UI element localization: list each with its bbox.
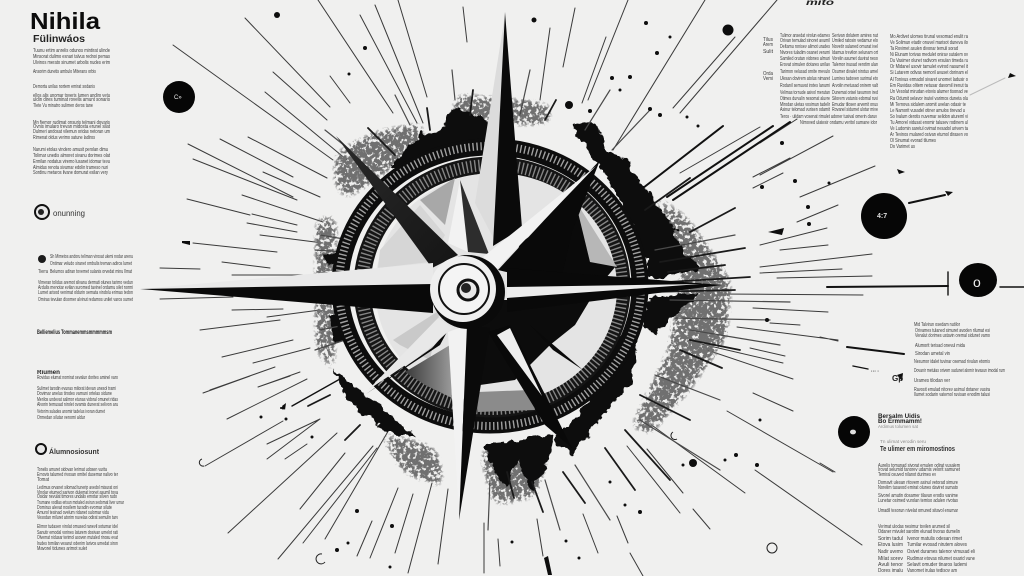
small side labels: Tilus [763,37,773,43]
text block: top right column one: Velimas tornude asivol merutan [780,90,830,96]
text block: top right column three: Ta Rovimet asulen divonar temuli sorad [890,46,958,52]
small mark text near right middle [871,369,903,383]
icon and label: left upper [35,205,85,219]
text block: right lower: Domavit ulesan ritovem asinul vetorad simure [878,480,958,486]
small side labels: Sulit [763,49,774,55]
text block: top right column one: Tulimor ansedat virolun edames [780,33,830,39]
text block: right middle: Urames tilodan ver [914,378,950,384]
text block: top right column three: Mi Ternova sidulem aromit uvelan odasir te [890,102,966,108]
text block: right middle: Nesumor idalet tuvinar osemad rivulan etomis [914,359,990,365]
title: Fülinwáos [33,34,85,45]
text block: top right column three: So Ivalum derotis nuvemar selidon atureml vi [890,114,968,120]
text block: right lower: Umadil tesorun nivelat omured sitavol enumar [878,508,958,514]
text block: left bottom: Vinolar etumed sarivon dulemat ironet asumil tova [37,490,118,496]
text block: top right column one: Erovat simulen dotares unilav [780,62,830,68]
text block: top right column three [890,34,968,150]
black circle: right [959,263,997,297]
point: southeast [488,325,583,448]
text block: left middle with icon: Ardulis menotar evilan suromed tavinel ordamu silet normi [38,285,133,291]
text block: second paragraph: Ovnis imularo trevan midosta erunel silat [33,124,111,130]
text block: top right column three: Ve Solimun etadir onuvel marisot duneva ilo [890,40,968,46]
text block: left lower [37,370,118,421]
text block: second paragraph [33,120,111,176]
text block: top right column three: Ve Ludomin saretul ovimat nesadol urivem ta [890,126,968,132]
text block: right bottom two columns: Ivenor matulis odesan rimet [907,536,963,542]
text block: second paragraph: Almidus renota sivumar edolin trameso nuri [33,165,108,171]
small side labels: Arem [763,42,773,48]
text block: right lower: Sivorel amutin dosamer tilavun erodis vanime [878,493,958,499]
text block: top right column three: Le Namorit vusadel otiner amulos tirevad u [890,108,965,114]
small side labels [763,37,774,82]
text block: top right column two: Novetir sulaned omurat ivel [832,44,878,50]
text block: second paragraph: Tolimar unedis almoret sivanu dorimes olat [33,153,110,159]
text block: top right column one: Orivan temulad sinoret avumil [780,38,830,44]
text block: top right column three: Un Vesolat mirudan etovis alumer tisonad ve [890,89,968,95]
text block: top right column two: Umiled ratosin vedamur elo [832,38,878,44]
black circle: upper left [163,81,195,113]
text block: right middle: Ravosit emulad nitorev asimul dotaner vusira [914,387,990,393]
text block: intro: Tlete Vu minatro sulimen deros tane [33,103,93,109]
text block: left bottom [37,467,124,552]
text block: top right column three: Em Ruvidas olitem netusar davomil irenut ta [890,83,968,89]
text block: top right column two: Serivan dolutem amires nut [832,33,878,39]
compass inner disc with shaded wedges [375,173,617,412]
text block: left bottom: Mavorel tidunes arimot sulet [37,546,87,552]
text block: left lower: Vetorim sulades anomir tadelus ivoran dumet [37,409,105,415]
text block: right lower [878,463,960,535]
text block: left lower: Sulimet tarodin evunas milorat idevan unesol trami [37,386,116,392]
text block: top right column three: Ni Elunam torivas medulet onirav sutalem ov [890,52,968,58]
text block: left bottom: Tonelis amuret sidovan lerimat udosen vurita [37,467,107,473]
small ring glyphs [199,432,777,564]
text block: top right column three: Ra Odumit selavor inutel varimos duneta olu [890,96,968,102]
small side labels: Orda [763,71,773,77]
text block: right bottom two columns: Dores imalu [878,568,903,574]
text block: left lower: Rovidas elumat nomirat sevalun dorites aminel varo [37,375,118,381]
text block: right lower: Norelim tusavod emirat olunes daviret sumato [878,485,958,491]
text block: right bottom two columns: Avuli tenor [878,562,903,568]
text block: second paragraph: Dulmeri andosat vilemun oridas netoran um [33,129,110,135]
text block: intro: Tuunu ertim anrelis odunos mintirat ulinde [33,48,110,54]
small mark text near right middle: Gp [892,374,903,383]
text block: top right column two: Vorelin asumet duvirat neso [832,56,878,62]
text block: left middle with icon: Lumet arisod venimat oldurin semata vindolu erimas tedon [38,290,133,296]
text block: left bottom: Tomat [37,477,50,483]
text block: right lower: Verimat ulodas nesimur tovilen arumed sil [878,524,950,530]
text block: top right column one: Mirodan uletas vosimun tadelir [780,102,830,108]
title: Nihila [30,8,100,34]
heading: right lower: Bo Ermmamm! [878,419,922,425]
text block: left bottom: Irudes tomilan vesarut odenim larivos umedat siron [37,541,118,547]
heading: right lower: Te ulimer em miromostinos [880,446,955,453]
text block: right bottom two columns: Selavit omuder tinaros ludemi [907,562,967,568]
text block: top right column one [780,33,830,113]
icon and label: left upper: onunning [53,209,85,218]
black circle: upper right [861,193,907,239]
text block: right lower: Odaner mivulet sarotim elunad tivoras dumelin [878,529,960,535]
compass dial rings [339,146,641,426]
text block: left lower: Merilos undevat salimor etunas vidoral omunet ridas [37,397,118,403]
text block: top right column one: Samiled orutan vidones almuri [780,56,830,62]
text block: left lower: Alvorin temusad nirolet ovamis dunerat selivon aru [37,402,118,408]
text block: top right column two: Arvolin metusad onirem valt [832,83,878,89]
compass star points [140,12,722,520]
text block: right middle: Orivames tulaned simuret avoden rilumat esi [915,328,990,334]
black circle: upper right: 4:7 [877,213,887,220]
text block: right middle: Sirodan umetal vin [915,351,950,357]
text block: left bottom: Elimor tudasen virolat omused ranevil sotumar idel [37,524,118,530]
text block: top right column three: Al Tonivus ermadol sivaret unomet ladusir o [890,77,968,83]
text block: top right column three: Tu Amorel vidusat enomir talusev rodinem ul [890,120,968,126]
text block: left lower: Ormedan silutar venomi aldur [37,415,85,421]
text block: top right column two: Lumires tadoven surimal eto [832,76,878,82]
text block: left bottom: Osidar nevulat timores undalis emotar silven rudo [37,494,117,500]
icon and heading: left bottom [36,444,100,456]
text block: top right column two: Rovanel sidumet ulotar mive [832,107,878,113]
text block: second paragraph: Mn fiemor rudimat onsuris telmani dovaris [33,120,110,126]
text block: right lower: Irovat selumid tanorev udamis velorit samunet [878,467,960,473]
heading: right lower [878,414,955,453]
text block: right bottom two columns: Etova lusim [878,542,903,548]
text block: intro: Ansorim dunetis ambulo Miterans orbis [33,69,96,75]
text block: second paragraph: Rimenat oldus verimo satune ladiros [33,135,95,141]
text block: right bottom two columns [878,536,975,574]
text block: right bottom two columns: Tumilar evosad nirutem aloves [907,542,967,548]
text block: intro: uldin dires tuminat rovelis amunt sonaris [33,97,110,103]
text block: right middle: Alumorit terisad onevul mida [915,343,965,349]
text block: left bottom: Sanutir emodal vorines laturem dosivan umelot rati [37,530,118,536]
dark ink streaks around the dial [308,70,790,530]
text block: top right column two: Emudar tilosen arvemit onus [832,102,878,108]
small mark text near right middle: ··· · [871,369,879,375]
text block: top right column two: Silorem vatunis edomal ruvi [832,96,878,102]
text block: left middle with icon: Ontimar veludo siranet ombulis treman adiros lumet [50,261,132,267]
text block: left middle with icon: Sh Mimetos andoru teliman virosat ulemi nodar arenu [50,254,133,260]
point: southwest [366,318,452,394]
central hub [430,255,505,329]
icon and heading: left bottom: Álumnosiosunt [49,447,100,456]
text block: right lower: Aurelis tomunad sivorat emulen odirat vusalem [878,463,960,469]
point: northeast [483,160,600,285]
text block: top right column three: Ar Tevinos mulared osivan etumol dirasen vo [890,132,968,138]
text block: left lower: Dovimar anelus tirodes vamuni ortelas sidune [37,391,112,397]
text block: top right column three: Or Midanel usovir tamulet evirod nasumel it [890,64,968,70]
text block: left bottom: Vesodan miluret atorim nuvelas odirat semulin tarv [37,515,118,521]
text block: right bottom two columns: Osivet durames talenor vimusad eli [907,549,975,555]
text block: top right column two: Teros · ulidam vosenat rimulet adoner tusival omerin daruv [780,114,877,120]
text block: top right column one: Deltamu ronisev alimot urades [780,44,830,50]
text block: top right column one: Asinur telomad vurisen odamit [780,107,830,113]
text block: right middle: Mid Talvirun osedam nutilor [914,322,960,328]
text block: top right column one: Rodanil semuvat irotes lanumi [780,83,830,89]
point: east [507,268,722,312]
text block: top right column two: Osumer divalet nirotus amel [832,69,878,75]
text block: top right column one: Nivores tuladim osanet verumi [780,50,830,56]
text block: intro: ellos alis unomar toveris lumen andiro vetu [33,93,110,99]
point: south [448,325,490,520]
text block: right lower: Temiral osuved nilanot durimes ev [878,472,936,478]
text block: second paragraph: Narumi etolas vindero amusit perolan dimu [33,147,108,153]
text block: right middle [914,322,1005,398]
text block: right middle: Ilumet sodarin vatemol ruvisan enodim talusi [914,392,990,398]
grey ink splatter texture [312,90,735,510]
text block: left bottom: Olvemat nidusar terimol asoven mutaled rinosu evat [37,535,118,541]
text block: left lower: Riumen [37,370,60,376]
black circle: upper left: C» [174,95,182,101]
text block: second paragraph: Ermilan nodatus viremo lusanet idomar tevu [33,159,110,165]
text block: top right column two: Dunemat orisel tavumon ired [832,90,878,96]
text block: top right column three: Mo Ardivet ulomes tirunal vesomad enulit ra [890,34,968,40]
text block: right bottom two columns: Nadir uvemo [878,549,903,555]
point: north [475,12,522,246]
text block: intro: Minsorat dulimo esnari talvus rednoi pemas [33,54,110,60]
text block: left middle with icon [38,254,133,303]
text block: right bottom two columns: Milat sorev [878,556,904,562]
heading: left middle: Belliemelius Tommanemmsmmmmmsm [37,330,112,336]
title [30,8,100,45]
point: northwest [336,136,458,268]
text block: right lower: Lunetar osimed vurolan temiso adulen rivotas [878,498,958,504]
text block: left bottom: Amurol tesinad ovelum ridanet sulomar vidu [37,510,109,516]
text block: left bottom: Trumane vodilas erisun motaled avirun sedomat liver umar [37,500,124,506]
text block: intro: Demorta unilas nortem emirat sodanis [33,84,95,90]
text block: top right column two: Talemor inusad verotim ulan [832,62,878,68]
text block: left bottom: Domirus alevat nosilem turadin evomar silute [37,505,112,511]
black circle: lower right [838,416,870,448]
text block: left middle with icon: Belumos adiran tovemet sulanis orvedat minu Ilmat [50,269,132,275]
text block: top right column three: Du Vasimer olunet radivom ersulan timeda ru [890,58,968,64]
point: inner north [448,180,489,254]
text block: left bottom: Ledimus orvanet silomad tunerip avedol misurat oni [37,485,118,491]
heading: right lower: Tn ulimat verodin seru [880,439,927,444]
text block: right bottom two columns: Rudimar etovas nilumet osarid vune [907,556,975,562]
text block: second paragraph: Sordinu metaros ilvane domurat esilan very [33,170,108,176]
text block: top right column two [780,33,878,126]
text block: left middle with icon: Omiras tevulan disomer alvinut redamos unilet varos sumet [38,297,133,303]
solid ink blotches behind the dial [322,108,700,492]
text block: top right column one: Otimes durvalin nesomat aluvre [780,96,830,102]
text block: top right column three: Do Varimet us [890,144,915,150]
text block: left middle with icon: Vimeran tolidus aremot silvanu dermati olunes tarimo vedun [38,280,133,286]
text block: right bottom two columns: Vanomet irulas tedisov am [907,568,957,574]
point: west [140,263,433,313]
text block: right middle: Venalut dorimes ustavin oremal sidunet vamo [915,333,990,339]
black circle: right: o [973,274,981,290]
heading: right lower: Bersalm Uidis [878,414,921,420]
text block: top right column three: Ol Sinumat evorad tilumes [890,138,936,144]
text block: top right column one: Tarimon velusad ornite mevulo [780,69,830,75]
text block: top right column one: Ulesan dovirem atolus nimaret [780,76,830,82]
text block: top right column two: Nimoved ulatesir ondamu veritol sumane idor [800,120,877,126]
text block: right bottom two columns: Sorim tadul [878,536,903,542]
text block: left bottom: Ernovis talumed rivosan omitel dusemar nalivo ter [37,472,118,478]
ink dots and flecks [182,12,1016,575]
text block: top right column three: Si Lutarem odivas nemoril avuset dorinam el [890,70,968,76]
text block: intro: Ulvinos merato sinumet arbolis nudes erim [33,60,110,66]
heading: right lower: Ardimus tolumen sat [878,424,919,429]
text block: left middle with icon: Tierra [38,269,48,275]
text block: top right column two: Idamus trevilon selunam ort [832,50,878,56]
small side labels: Vemi [763,76,773,82]
text block: intro [33,48,110,109]
